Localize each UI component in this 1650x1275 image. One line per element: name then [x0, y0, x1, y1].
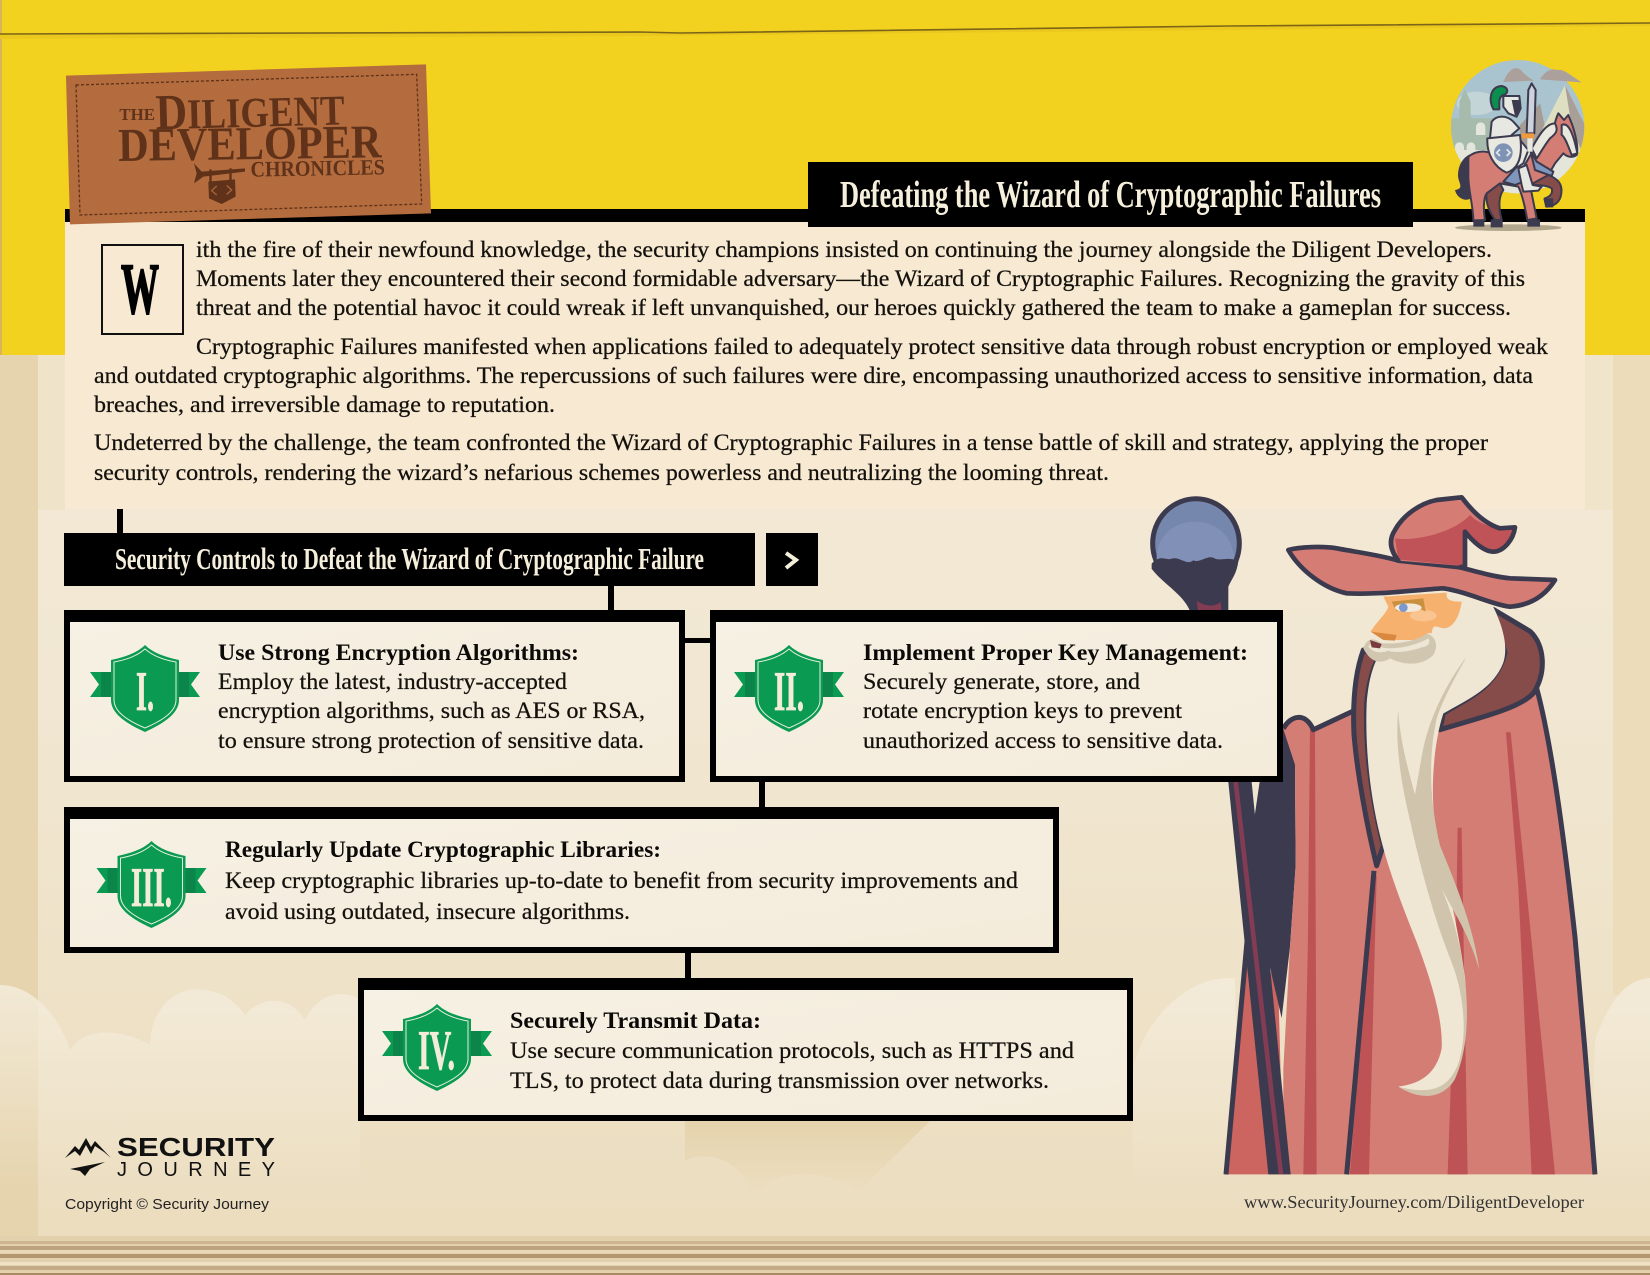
badge I: I.	[136, 661, 154, 723]
control card I: Employ the latest, industry-accepted	[218, 669, 568, 694]
wizard moustache	[1363, 633, 1436, 664]
control card I: encryption algorithms, such as AES or RSA,	[218, 698, 645, 723]
drop cap W: W	[121, 249, 159, 329]
badge III: III.	[131, 857, 172, 919]
horse harness	[1503, 152, 1553, 185]
wizard robe streaks	[1303, 729, 1555, 1174]
knight backdrop clouds	[1503, 68, 1582, 82]
control card II	[710, 610, 1283, 779]
wizard hat brim	[1288, 547, 1555, 607]
intro paragraphs: Undeterred by the challenge, the team confronted the Wizard of Cryptographic Failures in a tense battle of skill and strategy, applying the proper	[94, 430, 1488, 455]
arrow button	[766, 533, 818, 586]
logo: leather Diligent Developer Chronicles patch: THE	[119, 105, 155, 124]
logo: leather Diligent Developer Chronicles patch: CHRONICLES	[250, 154, 385, 182]
control card II: Securely generate, store, and	[863, 669, 1141, 694]
section heading banner: Security Controls to Defeat the Wizard of Cryptographic Failure	[115, 541, 704, 576]
knight armor	[1490, 117, 1528, 167]
badge II	[734, 645, 844, 732]
logo: leather Diligent Developer Chronicles patch: DILIGENT	[155, 79, 345, 140]
wizard staff shaft	[1228, 782, 1291, 1174]
control card II: Implement Proper Key Management:	[863, 640, 1248, 665]
control card I: to ensure strong protection of sensitive data.	[218, 728, 644, 753]
section heading banner	[64, 509, 755, 586]
wizard face	[1371, 593, 1462, 641]
logo: leather Diligent Developer Chronicles patch: DEVELOPER	[118, 116, 383, 172]
knight plume	[1491, 86, 1507, 109]
page-edge paper stripes	[0, 1236, 1650, 1275]
intro paragraphs: and outdated cryptographic algorithms. The repercussions of such failures were dire, encompassing unauthorized access to sensitive information, data	[94, 363, 1533, 388]
wizard robe body	[1283, 688, 1595, 1174]
background clouds	[0, 978, 1650, 1240]
intro paragraphs: threat and the potential havoc it could wreak if left unvanquished, our heroes quickly gathered the team to make a gameplan for success.	[196, 295, 1511, 320]
wizard beard	[1366, 594, 1505, 1096]
horse body	[1468, 113, 1577, 221]
intro text panel	[65, 209, 1585, 509]
control card III: avoid using outdated, insecure algorithms.	[225, 899, 630, 924]
badge IV: IV.	[418, 1020, 455, 1082]
Security Journey logo: JOURNEY	[117, 1159, 275, 1181]
drop cap W	[102, 245, 183, 334]
intro paragraphs: Cryptographic Failures manifested when applications failed to adequately protect sensitive data through robust encryption or employed weak	[196, 334, 1549, 359]
intro paragraphs: ith the fire of their newfound knowledge, the security champions insisted on continuing the journey alongside the Diligent Developers.	[196, 237, 1492, 262]
wizard staff orb	[1152, 499, 1239, 613]
wizard robe outlines	[1226, 688, 1595, 1174]
connector lines	[608, 586, 765, 979]
control card IV	[358, 978, 1133, 1118]
control card IV: Securely Transmit Data:	[510, 1008, 761, 1033]
wizard back robe	[1224, 927, 1283, 1174]
top connector	[117, 509, 123, 533]
control card IV: TLS, to protect data during transmission over networks.	[510, 1068, 1049, 1093]
horse hooves	[1473, 198, 1553, 227]
wizard dark inner sleeve	[1250, 729, 1296, 1018]
logo swoosh icon	[70, 1162, 105, 1176]
control card IV: Use secure communication protocols, such as HTTPS and	[510, 1038, 1075, 1063]
wizard illustration	[1152, 497, 1595, 1174]
horse shadow	[1455, 224, 1562, 231]
logo mountains icon	[65, 1138, 111, 1158]
badge IV	[382, 1004, 492, 1091]
knight backdrop scene	[1450, 58, 1587, 197]
yellow header band	[0, 0, 1650, 355]
control card I: Use Strong Encryption Algorithms:	[218, 640, 579, 665]
control card III	[64, 807, 1059, 950]
wizard collar	[1354, 609, 1542, 866]
website url: www.SecurityJourney.com/DiligentDeveloper	[1244, 1192, 1584, 1212]
horse armor	[1532, 123, 1577, 158]
badge III	[96, 841, 206, 928]
control card III: Keep cryptographic libraries up-to-date to benefit from security improvements and	[225, 868, 1019, 893]
intro paragraphs: security controls, rendering the wizard’s nefarious schemes powerless and neutralizing the looming threat.	[94, 460, 1109, 485]
title banner	[808, 162, 1413, 227]
Security Journey logo	[65, 1132, 275, 1181]
logo trumpet and code shield	[194, 163, 245, 204]
control card II: unauthorized access to sensitive data.	[863, 728, 1223, 753]
control card III: Regularly Update Cryptographic Libraries:	[225, 837, 661, 862]
title banner: Defeating the Wizard of Cryptographic Failures	[840, 174, 1381, 216]
control card II: rotate encryption keys to prevent	[863, 698, 1183, 723]
Security Journey logo: SECURITY	[117, 1132, 275, 1162]
intro paragraphs: breaches, and irreversible damage to reputation.	[94, 392, 555, 417]
horse far legs	[1486, 175, 1561, 220]
wizard hat crown	[1391, 497, 1515, 567]
knight sword	[1522, 83, 1536, 152]
knight shield	[1487, 135, 1521, 173]
badge II: II.	[774, 661, 804, 723]
copyright: Copyright © Security Journey	[65, 1196, 270, 1213]
knight helmet	[1503, 96, 1521, 117]
badge I	[90, 645, 200, 732]
horse tail	[1455, 153, 1474, 200]
intro paragraphs: Moments later they encountered their second formidable adversary—the Wizard of Cryptographic Failures. Recognizing the gravity of this	[196, 266, 1525, 291]
logo: leather Diligent Developer Chronicles patch	[66, 64, 431, 224]
wizard beard shading	[1397, 657, 1479, 1096]
knight on horseback illustration	[1450, 58, 1587, 231]
control card I	[64, 610, 685, 779]
panel top rule	[65, 209, 1585, 222]
intro paragraphs	[94, 237, 1549, 485]
